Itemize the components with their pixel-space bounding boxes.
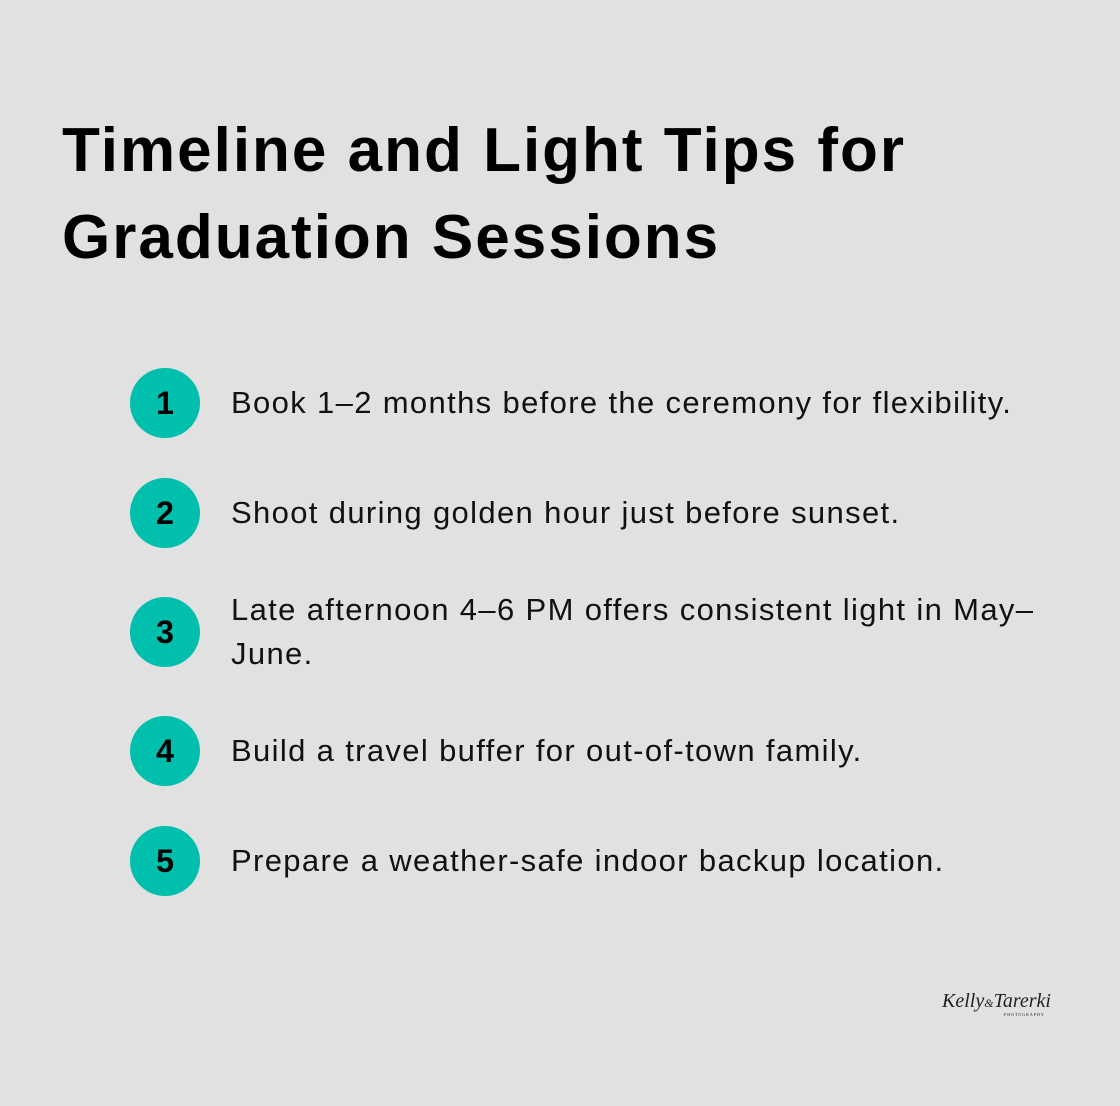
item 2: Shoot during golden hour just before sunset. — [231, 495, 900, 530]
item 5: 5 — [156, 843, 174, 879]
item 1 — [130, 368, 1012, 438]
item 3 — [130, 592, 1034, 671]
title — [62, 116, 906, 272]
item 1: Book 1–2 months before the ceremony for flexibility. — [231, 385, 1012, 420]
item 5: Prepare a weather-safe indoor backup location. — [231, 843, 944, 878]
logo signature: Kelly&Tarerki — [942, 990, 1051, 1012]
item 4: Build a travel buffer for out-of-town family. — [231, 733, 863, 768]
title: Timeline and Light Tips for — [62, 116, 906, 185]
item 2 — [130, 478, 900, 548]
item 3: Late afternoon 4–6 PM offers consistent light in May– — [231, 592, 1034, 627]
item 1: 1 — [156, 385, 174, 421]
item 3: 3 — [156, 614, 174, 650]
item 4 — [130, 716, 863, 786]
title: Graduation Sessions — [62, 203, 720, 272]
item 2: 2 — [156, 495, 174, 531]
item 4: 4 — [156, 733, 174, 769]
item 3: June. — [231, 636, 314, 671]
logo signature: PHOTOGRAPHY — [1004, 1012, 1045, 1017]
item 5 — [130, 826, 944, 896]
